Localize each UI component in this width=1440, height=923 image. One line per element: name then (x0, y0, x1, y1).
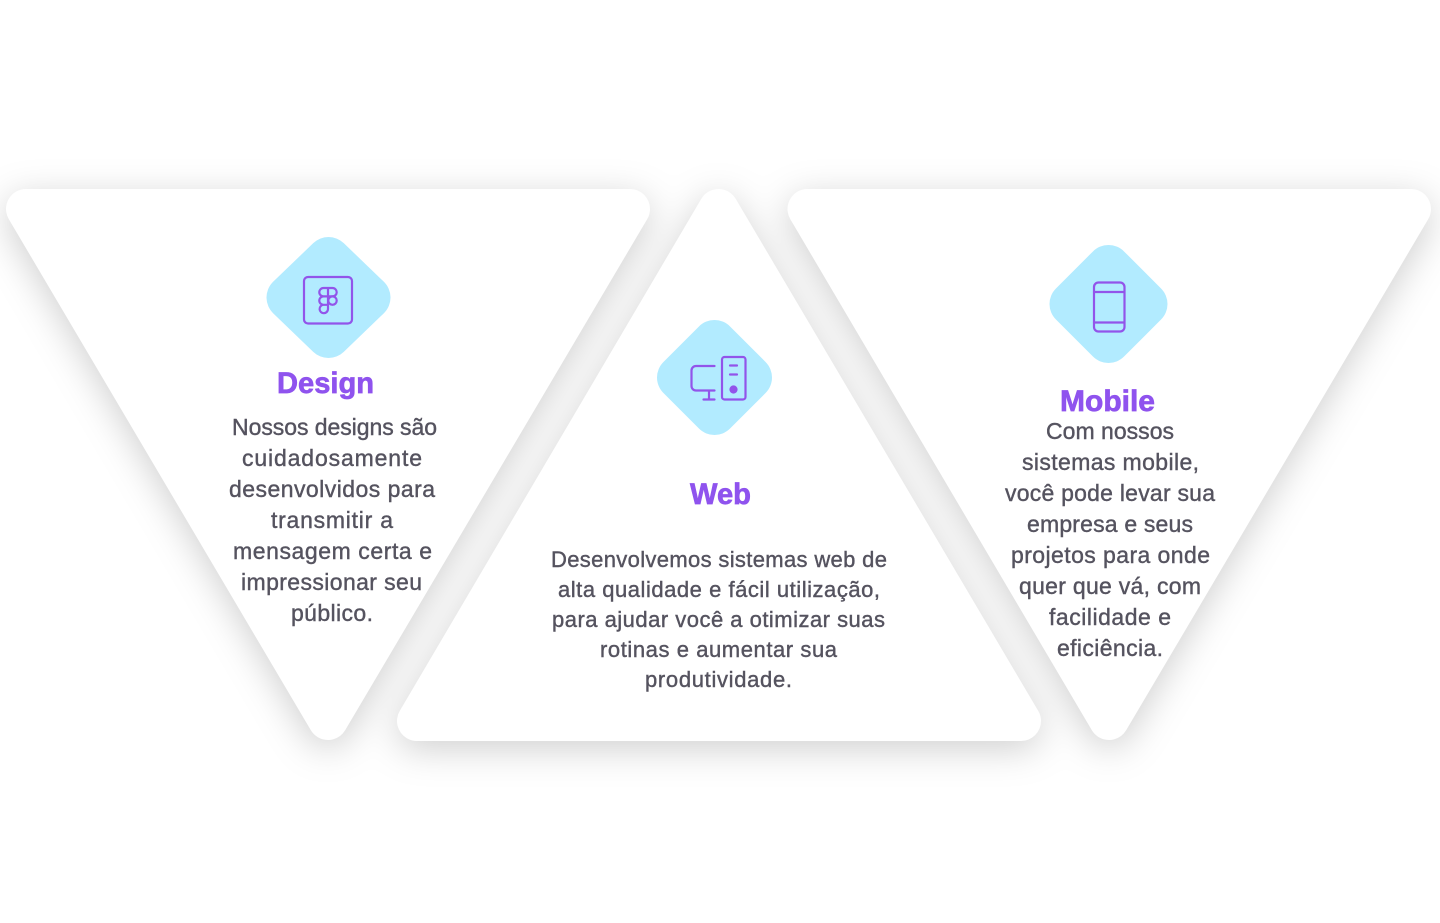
text: design description: mensagem certa e (233, 538, 432, 564)
heading: Design: Design (277, 367, 374, 400)
text: design description: Nossos designs são (232, 414, 437, 440)
text: design description: transmitir a (271, 507, 393, 533)
text: mobile description: eficiência. (1057, 635, 1163, 661)
panel: design (229, 259, 437, 626)
text: design description: público. (291, 600, 373, 626)
text: web description: rotinas e aumentar sua (600, 637, 838, 662)
text: web description: para ajudar você a otimizar suas (552, 607, 885, 632)
text: mobile description (1005, 418, 1215, 661)
text: mobile description: Com nossos (1046, 418, 1174, 444)
text: web description: Desenvolvemos sistemas web de (551, 547, 887, 572)
panel: web (551, 342, 887, 692)
text: design description (229, 414, 437, 626)
text: design description: impressionar seu (241, 569, 422, 595)
heading: Web: Web (690, 478, 751, 511)
icon: computer (679, 342, 750, 413)
icon: figma (288, 259, 368, 336)
text: mobile description: empresa e seus (1027, 511, 1193, 537)
text: mobile description: você pode levar sua (1005, 480, 1215, 506)
text: design description: cuidadosamente (242, 445, 422, 471)
icon: phone (1072, 267, 1146, 341)
text: mobile description: projetos para onde (1011, 542, 1210, 568)
triangle panels (26, 209, 1411, 721)
heading: Mobile: Mobile (1060, 385, 1155, 418)
text: mobile description: sistemas mobile, (1022, 449, 1199, 475)
text: mobile description: quer que vá, com (1019, 573, 1201, 599)
text: mobile description: facilidade e (1049, 604, 1171, 630)
text: web description: produtividade. (645, 667, 792, 692)
text: design description: desenvolvidos para (229, 476, 435, 502)
text: web description: alta qualidade e fácil utilização, (558, 577, 880, 602)
panel: mobile (1005, 267, 1215, 661)
text: web description (551, 547, 887, 692)
